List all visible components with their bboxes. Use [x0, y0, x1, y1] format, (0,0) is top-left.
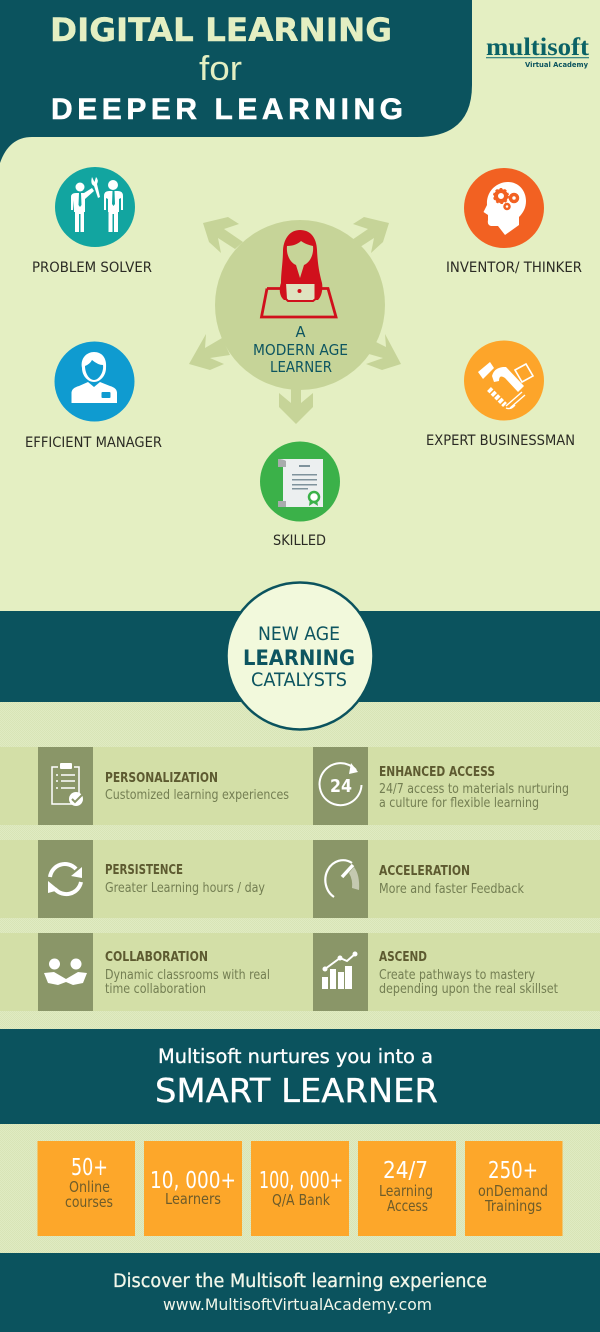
stat: question bank: 100, 000+ [259, 1168, 343, 1194]
row: persistence and acceleration [0, 840, 600, 918]
icon: 24 hour clock [313, 747, 368, 825]
heading text: CATALYSTS [251, 670, 347, 691]
central label: A [296, 323, 306, 341]
icon: refresh arrows [38, 840, 93, 918]
icon: head with gears [484, 182, 526, 235]
text: ascend: Create pathways to mastery [379, 967, 535, 983]
stats panel background [0, 1124, 600, 1253]
stat: on-demand trainings: 250+ [488, 1158, 538, 1184]
text: acceleration: ACCELERATION [379, 864, 470, 879]
stat: learners: 10, 000+ [150, 1168, 236, 1194]
logo: Virtual Academy [525, 61, 588, 69]
header panel [0, 0, 472, 163]
icon: speedometer [313, 840, 368, 918]
stat: online courses [38, 1141, 135, 1236]
text: personalization [105, 771, 289, 803]
stat: learning access: Access [387, 1197, 428, 1215]
band: smart learner: SMART LEARNER [155, 1071, 438, 1110]
footer: www.MultisoftVirtualAcademy.com [163, 1295, 432, 1314]
label: EFFICIENT MANAGER [25, 435, 162, 451]
text: ascend [379, 950, 558, 997]
band: smart learner: Multisoft nurtures you into a [158, 1045, 433, 1068]
label: INVENTOR/ THINKER [446, 260, 582, 276]
text: collaboration: COLLABORATION [105, 950, 208, 965]
icon: handshake [478, 362, 533, 409]
stat: on-demand trainings [465, 1141, 562, 1236]
icon: learner at laptop [262, 230, 336, 317]
text: acceleration: More and faster Feedback [379, 881, 524, 897]
icon: rising bar chart [313, 933, 368, 1011]
title line 2: for [199, 50, 242, 88]
stat: learning access [358, 1141, 456, 1236]
band: catalysts heading [0, 582, 600, 730]
central label [253, 323, 348, 376]
text: personalization: Customized learning experiences [105, 787, 289, 803]
text: collaboration: time collaboration [105, 981, 206, 997]
arrows around central circle [189, 217, 401, 424]
stat: on-demand trainings: Trainings [484, 1197, 542, 1215]
text: ascend: depending upon the real skillset [379, 981, 558, 997]
stat: on-demand trainings: onDemand [478, 1182, 548, 1200]
text: collaboration [105, 950, 270, 997]
icon: certificate scroll [278, 459, 323, 507]
outcome: efficient manager [25, 342, 162, 451]
central label: LEARNER [270, 358, 332, 376]
text: enhanced access: ENHANCED ACCESS [379, 765, 495, 780]
heading text [243, 624, 355, 691]
stat: online courses: Online [69, 1178, 110, 1196]
text: persistence: Greater Learning hours / day [105, 880, 265, 896]
icon: two workers with wrench [71, 177, 123, 232]
central circle: a modern age learner [215, 220, 385, 390]
text: collaboration: Dynamic classrooms with real [105, 967, 270, 983]
band: smart learner [0, 1029, 600, 1124]
label: PROBLEM SOLVER [32, 260, 152, 276]
stat: online courses: courses [65, 1193, 113, 1211]
title line 1: DIGITAL LEARNING [50, 11, 392, 49]
icon: two people collaborating [38, 933, 93, 1011]
logo: multisoft [486, 34, 590, 61]
icon: manager bust [72, 352, 117, 403]
central label: MODERN AGE [253, 341, 348, 359]
text: personalization: PERSONALIZATION [105, 771, 218, 786]
icon: 24 hour clock: 24 [330, 776, 352, 797]
text: ascend: ASCEND [379, 950, 427, 965]
row: personalization and enhanced access [0, 747, 600, 825]
text: persistence [105, 863, 265, 896]
stat: learning access: Learning [379, 1182, 433, 1200]
outcome: inventor thinker [446, 168, 582, 276]
outcome: problem solver [32, 167, 152, 276]
icon: clipboard [38, 747, 93, 825]
footer [0, 1253, 600, 1332]
heading text: LEARNING [243, 646, 355, 670]
title line 3: DEEPER LEARNING [51, 93, 403, 126]
outcome: skilled [260, 442, 340, 549]
catalysts panel background [0, 702, 600, 1029]
stat: question bank: Q/A Bank [272, 1191, 330, 1209]
outcome: expert businessman [426, 340, 575, 449]
footer: Discover the Multisoft learning experience [113, 1271, 487, 1292]
text: acceleration [379, 864, 524, 897]
text: enhanced access: a culture for flexible learning [379, 795, 539, 811]
stat: learning access: 24/7 [383, 1158, 428, 1184]
stat: learners: Learners [165, 1190, 221, 1208]
label: SKILLED [273, 533, 326, 549]
text: persistence: PERSISTENCE [105, 863, 183, 878]
stat: learners [144, 1141, 242, 1236]
row: collaboration and ascend [0, 933, 600, 1011]
text: enhanced access [379, 765, 569, 811]
stat: question bank [251, 1141, 349, 1236]
stat: online courses: 50+ [71, 1155, 108, 1181]
label: EXPERT BUSINESSMAN [426, 433, 575, 449]
heading text: NEW AGE [258, 624, 340, 645]
